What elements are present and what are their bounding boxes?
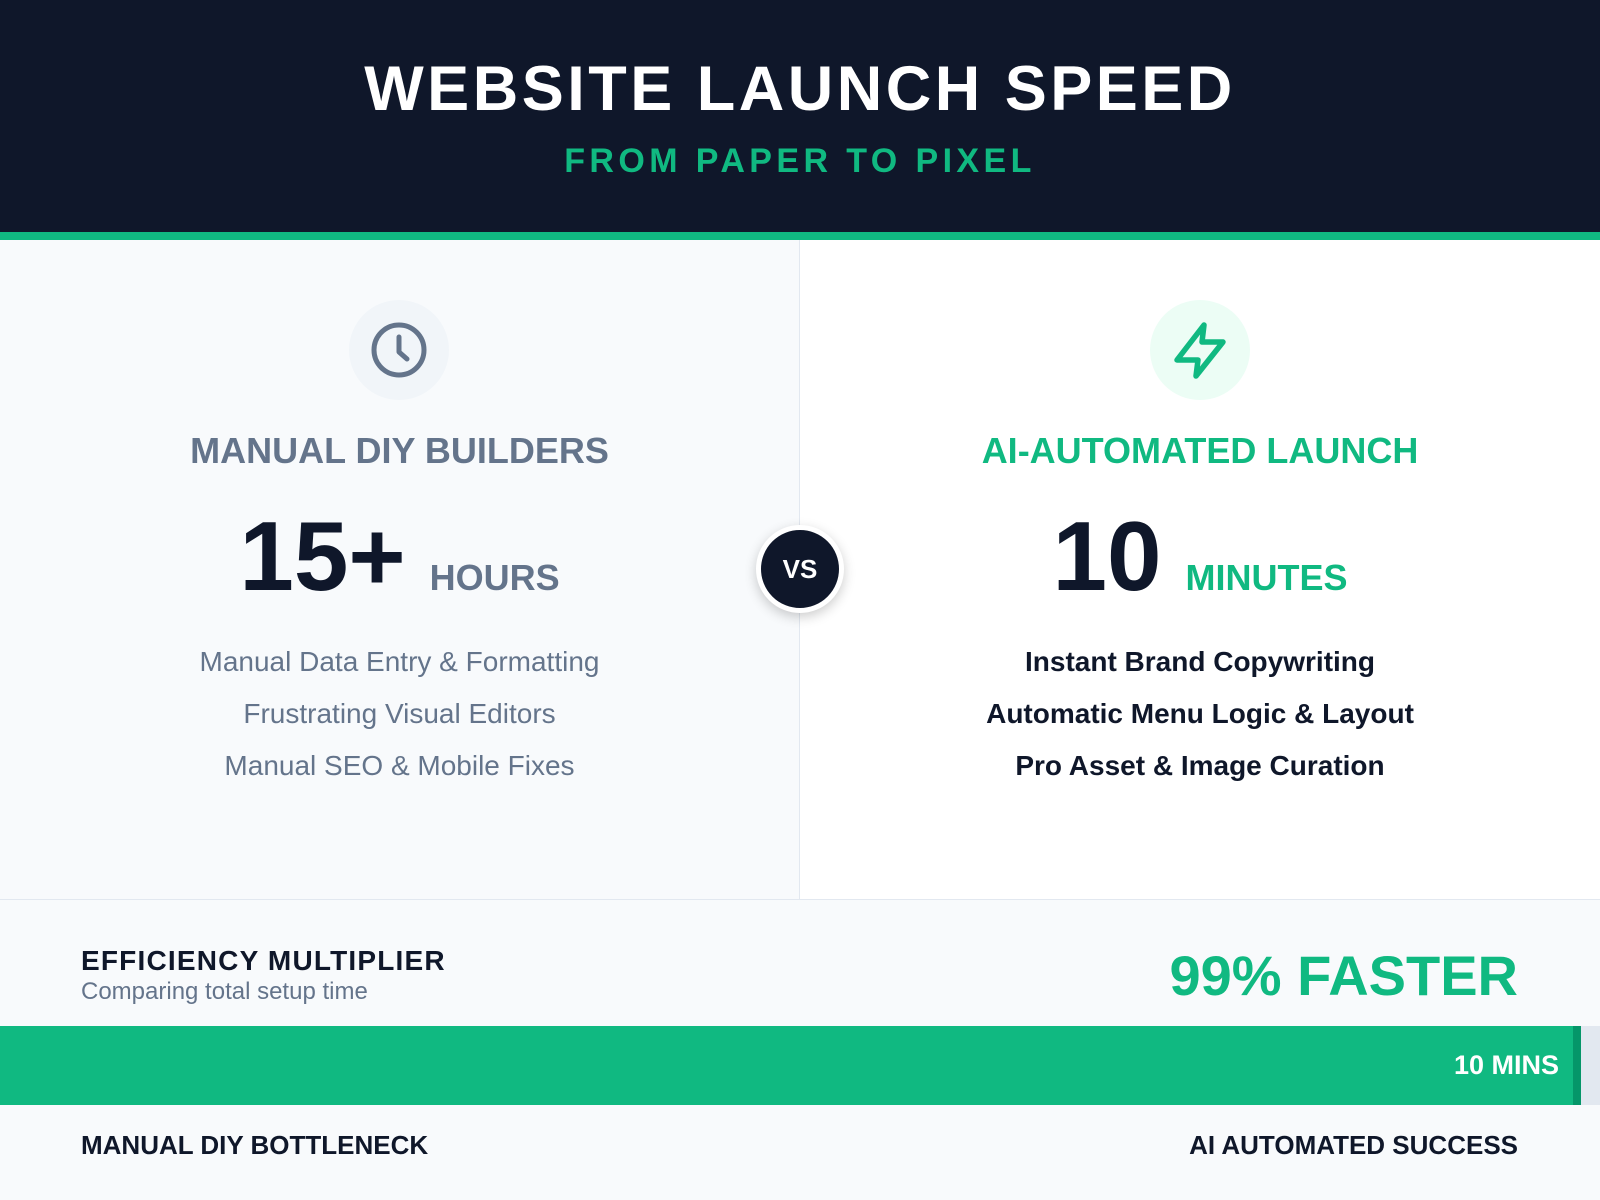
list: manual tasks: Manual SEO & Mobile Fixes	[224, 750, 575, 781]
efficiency label: Comparing total setup time	[81, 978, 368, 1005]
bottom label right: AI AUTOMATED SUCCESS	[1189, 1130, 1518, 1160]
bottom label left: MANUAL DIY BOTTLENECK	[81, 1130, 428, 1160]
list: manual tasks: Frustrating Visual Editors	[243, 698, 556, 729]
icon: lightning	[1150, 300, 1250, 400]
bar chart	[0, 1026, 1600, 1105]
title: WEBSITE LAUNCH SPEED	[364, 54, 1236, 124]
efficiency label	[81, 945, 446, 1005]
heading: MANUAL DIY BUILDERS	[190, 430, 609, 471]
big stat: 15+ hours: 15+ HOURS	[239, 501, 560, 611]
99% faster: 99% FASTER	[1169, 944, 1518, 1007]
icon: clock	[349, 300, 449, 400]
panel: manual	[0, 240, 799, 900]
VS badge	[756, 525, 844, 613]
list: AI features: Automatic Menu Logic & Layout	[986, 698, 1414, 729]
list: manual tasks: Manual Data Entry & Formatting	[200, 646, 599, 677]
heading: AI-AUTOMATED LAUNCH	[982, 430, 1418, 471]
VS badge: VS	[783, 554, 817, 584]
list: manual tasks	[200, 646, 599, 781]
bar label: 10 MINS	[1454, 1050, 1559, 1080]
header	[0, 0, 1600, 232]
list: AI features	[986, 646, 1414, 781]
efficiency label: EFFICIENCY MULTIPLIER	[81, 945, 446, 976]
subtitle: FROM PAPER TO PIXEL	[564, 142, 1036, 180]
big stat: 10 minutes: 10 MINUTES	[1052, 501, 1348, 611]
panel: AI	[800, 240, 1600, 900]
list: AI features: Pro Asset & Image Curation	[1015, 750, 1385, 781]
list: AI features: Instant Brand Copywriting	[1025, 646, 1375, 677]
